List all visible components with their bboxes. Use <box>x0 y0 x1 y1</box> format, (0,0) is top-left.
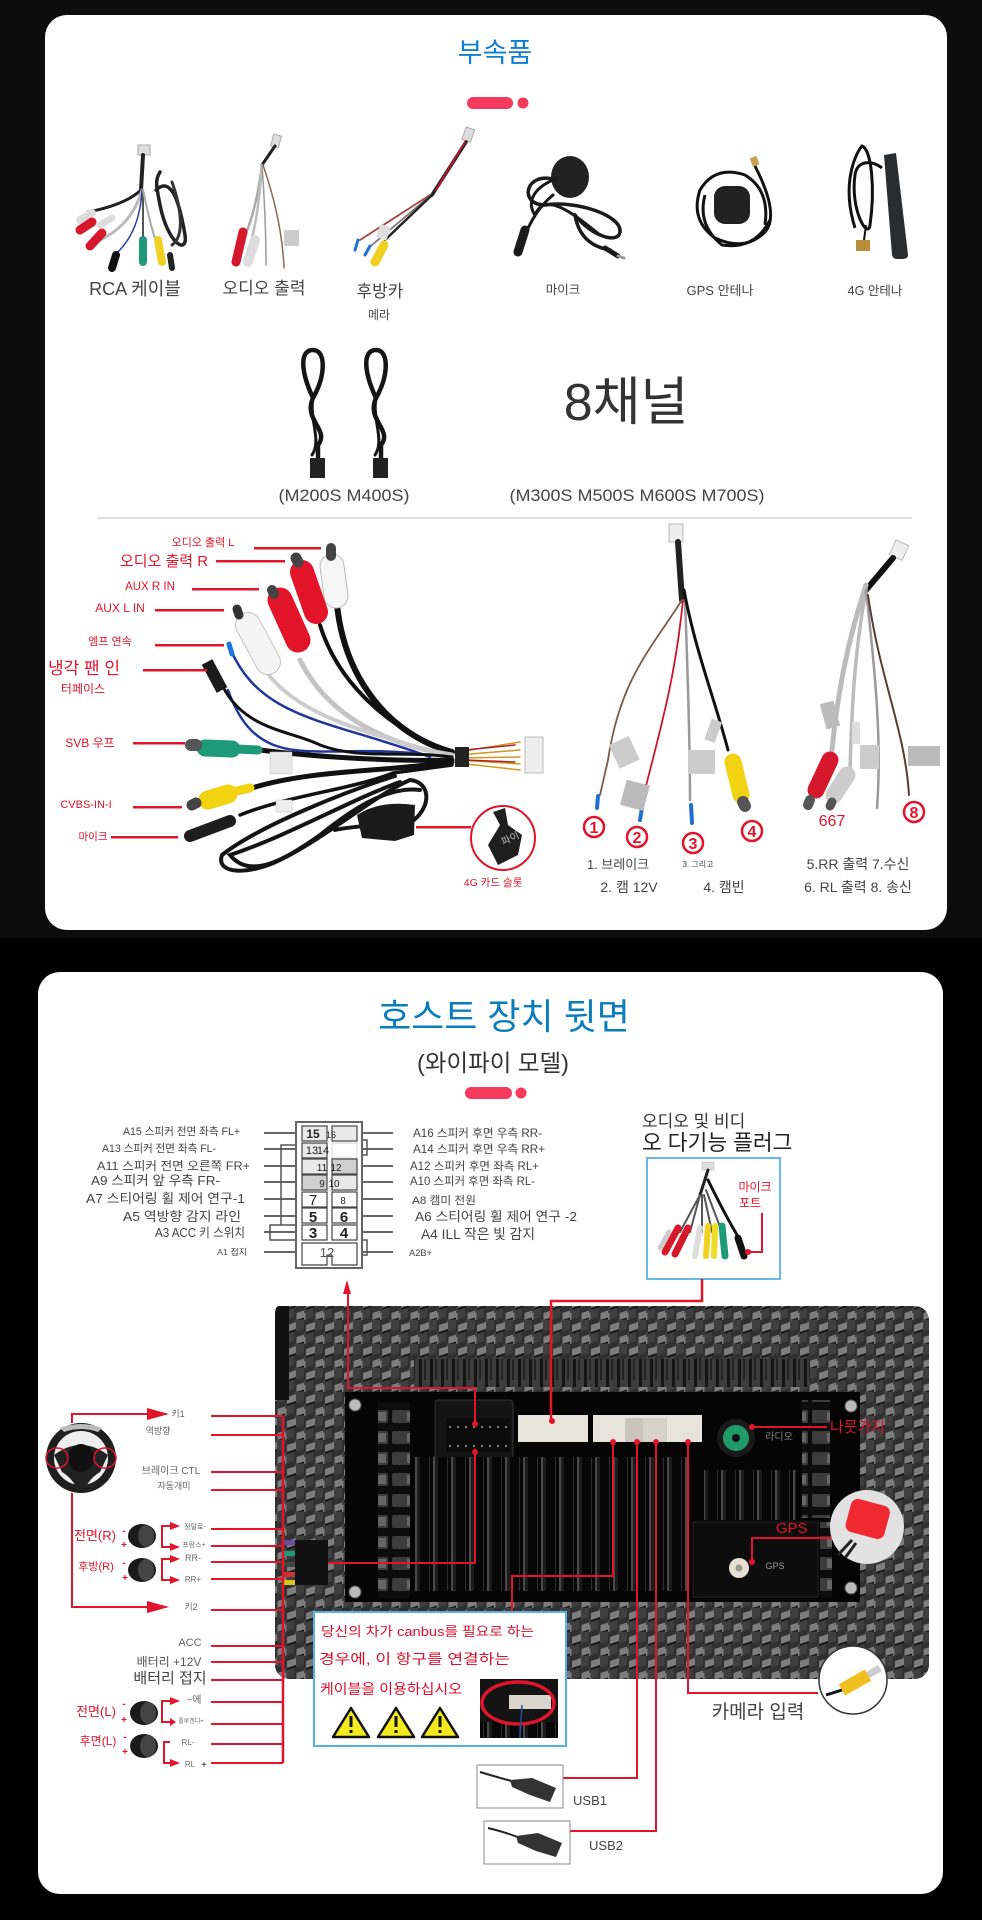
pinout labels: A1 접지 <box>217 1247 247 1257</box>
accessory: 4G antenna <box>849 146 908 259</box>
pinout labels: A2B+ <box>409 1248 432 1258</box>
diagram: ISO connector pinout: 16 <box>326 1130 336 1140</box>
wire labels: RL- <box>182 1738 195 1747</box>
canbus socket <box>435 1400 513 1490</box>
label: mic: 마이크 <box>79 831 108 843</box>
wire labels: 프랑스+ <box>182 1541 206 1549</box>
diagram: ISO connector pinout: 12 <box>320 1245 334 1260</box>
panel: multifunction plug image <box>647 1158 780 1279</box>
left connector comb <box>378 1403 410 1598</box>
wire labels: 정말로- <box>184 1522 206 1531</box>
plug: fan connector <box>207 662 222 690</box>
USB cable 1 <box>477 1765 563 1808</box>
pinout labels <box>86 1125 577 1258</box>
speaker icons: - <box>122 1526 126 1537</box>
head unit body <box>275 1306 929 1679</box>
label: SVB woofer: SVB 우프 <box>65 736 115 750</box>
pinout labels: A7 스티어링 휠 제어 연구-1 <box>86 1191 245 1206</box>
accessory: reversing camera cable <box>355 127 475 262</box>
pinout labels: A3 ACC 키 스위치 <box>155 1226 245 1240</box>
label: harness number 667: 667 <box>819 813 845 830</box>
label: cam 12V: 2. 캠 12V <box>600 879 658 895</box>
plug: CVBS yellow <box>208 794 228 800</box>
panel: host unit rear <box>38 972 943 1894</box>
label: microphone: 마이크 <box>546 283 580 297</box>
connector <box>458 742 520 770</box>
label: AUX R IN: AUX R IN <box>125 581 175 593</box>
pinout labels: A9 스피커 앞 우측 FR- <box>91 1173 220 1188</box>
wire labels: 배터리 +12V <box>137 1655 201 1669</box>
accessory: GPS antenna <box>697 156 771 246</box>
diagram: camera harness <box>597 524 745 823</box>
cables <box>220 605 452 815</box>
pinout labels: A4 ILL 작은 빛 감지 <box>421 1226 535 1242</box>
diagram: large RCA harness <box>190 548 543 871</box>
speaker icons: - <box>122 1558 126 1569</box>
wire labels: 브레이크 CTL <box>142 1465 201 1477</box>
plug: AUX R <box>280 600 298 640</box>
diagram: audio output harness <box>808 540 940 808</box>
speaker labels: 전면(R) <box>74 1528 116 1543</box>
diagram: ISO connector pinout <box>264 1122 393 1268</box>
diagram: ISO connector pinout: 10 <box>328 1179 340 1190</box>
plug: mic <box>190 821 230 836</box>
callout: canbus note: 경우에, 이 항구를 연결하는 <box>319 1651 510 1667</box>
label: rear camera line 2: 메라 <box>368 308 390 322</box>
badge 2: 2 <box>633 830 642 847</box>
diagram: ISO connector pinout: 4 <box>340 1225 349 1242</box>
diagram: ISO connector pinout: 5 <box>309 1209 317 1226</box>
heading ornament <box>467 97 528 109</box>
speaker icons: + <box>121 1715 127 1726</box>
pinout labels: A16 스피커 후면 우측 RR- <box>413 1127 542 1140</box>
speaker icons: + <box>121 1540 127 1551</box>
label: M300S M500S M600S M700S: (M300S M500S M600S M700S) <box>510 486 764 505</box>
number badges <box>584 802 924 853</box>
label: RL out, send: 6. RL 출력 8. 송신 <box>804 879 912 895</box>
label: 4G card slot: 4G 카드 슬롯 <box>464 877 523 889</box>
arrow: to ISO connector <box>343 1280 351 1294</box>
badge 3 <box>683 833 703 853</box>
diagram: ISO connector pinout: 3 <box>309 1225 317 1242</box>
icon: camera plug magnified <box>819 1646 887 1714</box>
screws <box>349 1399 857 1598</box>
pinout labels: A12 스피커 후면 좌측 RL+ <box>410 1160 539 1173</box>
routing lines on head unit <box>328 1279 832 1831</box>
label: RCA cable: RCA 케이블 <box>89 279 181 299</box>
speaker icons: + <box>122 1573 128 1584</box>
pinout labels: A10 스피커 후면 좌측 RL- <box>410 1175 535 1188</box>
speaker labels: 전면(L) <box>76 1704 116 1719</box>
diagram: ISO connector pinout: 15 <box>306 1127 320 1141</box>
label: CVBS-IN: CVBS-IN-I <box>60 799 112 811</box>
wire labels: 자동개미 <box>157 1481 191 1491</box>
wire labels: RL <box>185 1760 196 1769</box>
pinout labels: A13 스피커 전면 좌측 FL- <box>102 1142 216 1155</box>
accessory: microphone <box>518 156 624 258</box>
cable tags <box>270 752 292 774</box>
badge 8: 8 <box>910 805 919 822</box>
callout: canbus note: 케이블을 이용하십시오 <box>320 1681 462 1697</box>
label: audio out R: 오디오 출력 R <box>120 553 208 570</box>
label: mic port: 마이크 <box>738 1180 772 1194</box>
GPS socket <box>729 1558 749 1578</box>
diagram: ISO connector pinout: 13 <box>306 1145 318 1157</box>
diagram: ISO connector pinout: 11 <box>317 1163 328 1174</box>
label: GPS antenna: GPS 안테나 <box>687 283 754 298</box>
heading: AV multifunction plug <box>642 1112 792 1155</box>
icon: 4G card slot magnified: 파이 <box>500 830 521 848</box>
GPS block <box>693 1522 818 1597</box>
label: M200S M400S: (M200S M400S) <box>278 486 410 505</box>
speaker labels: 후방(R) <box>78 1560 114 1573</box>
badge 3: 3 <box>689 836 698 853</box>
label: amp connection: 엠프 연속 <box>88 635 132 648</box>
accessory: RCA cable <box>80 145 185 268</box>
diagram: ISO connector pinout: 9 <box>319 1179 325 1190</box>
USB cable 2 <box>484 1821 570 1864</box>
pinout labels: A15 스피커 전면 좌측 FL+ <box>123 1125 240 1138</box>
wire labels: + <box>201 1760 207 1771</box>
label: AUX L IN: AUX L IN <box>95 601 145 615</box>
heading: accessories: 부속품 <box>458 38 532 68</box>
pinout labels: A5 역방향 감지 라인 <box>123 1209 241 1224</box>
panel: accessories <box>45 15 947 930</box>
label: audio output: 오디오 출력 <box>223 279 305 298</box>
plug: audio out L <box>332 566 336 596</box>
label: radio: 라디오 <box>765 1431 793 1443</box>
badge 2 <box>627 827 647 847</box>
badge 8 <box>904 802 924 822</box>
radio socket <box>717 1419 755 1457</box>
icon: GPS antenna magnified <box>830 1490 904 1564</box>
label: camera input: 카메라 입력 <box>712 1701 804 1723</box>
right connector comb <box>802 1400 830 1518</box>
panel: multifunction plug image: 포트 <box>739 1196 761 1210</box>
wire labels: 배터리 접지 <box>133 1670 207 1687</box>
callout: canbus note <box>314 1612 566 1746</box>
label: 4G antenna: 4G 안테나 <box>848 284 903 298</box>
badge 4: 4 <box>748 824 757 841</box>
accessory: black cable pair <box>303 350 388 478</box>
label: ground: 3. 그리고 <box>683 860 713 869</box>
wire labels: ACC <box>178 1637 202 1649</box>
white connector strip 2 <box>593 1415 702 1442</box>
icon: steering wheel <box>46 1423 116 1493</box>
cable loop <box>221 776 426 871</box>
speaker labels <box>74 1528 116 1748</box>
label: rear camera line 1: 후방카 <box>357 282 404 301</box>
speaker icons: - <box>123 1732 127 1743</box>
heading: AV multifunction plug: 오디오 및 비디 <box>642 1112 745 1131</box>
label: GPS on unit: GPS <box>765 1561 785 1571</box>
wire labels: RR+ <box>185 1575 201 1584</box>
wire labels <box>133 1409 207 1771</box>
diagram: ISO connector pinout: 14 <box>317 1145 329 1157</box>
text: 8 channel: 8채널 <box>564 374 688 432</box>
callout lines and red labels <box>48 536 523 889</box>
speaker icons <box>121 1524 158 1758</box>
label: steering branch: 나뭇가지 <box>830 1419 885 1436</box>
wire labels: 역방향 <box>146 1425 170 1436</box>
speaker icons: + <box>122 1747 128 1758</box>
diagram: ISO connector pinout: 8 <box>340 1196 346 1207</box>
label: cam bin: 4. 캠빈 <box>703 879 745 895</box>
diagram: ISO connector pinout: 7 <box>309 1192 317 1209</box>
diagram: ISO connector pinout: 6 <box>340 1209 348 1226</box>
badge 1: 1 <box>590 820 599 837</box>
plug: SVB green <box>205 748 232 749</box>
label: USB1: USB1 <box>573 1793 607 1808</box>
plug: amp blue <box>229 644 232 654</box>
heading: host unit rear: 호스트 장치 뒷면 <box>378 996 630 1037</box>
diagram: ISO connector pinout: 12 <box>330 1163 342 1174</box>
speaker icons: - <box>122 1699 126 1710</box>
badge 4 <box>742 821 762 841</box>
white connector strip 1 <box>518 1415 588 1442</box>
wire labels: 키1 <box>171 1409 185 1419</box>
pinout labels: A8 캠미 전원 <box>412 1194 476 1207</box>
subheading: wifi model: (와이파이 모델) <box>417 1050 569 1076</box>
pinout labels: A14 스피커 후면 우측 RR+ <box>413 1143 545 1156</box>
pinout labels: A6 스티어링 휠 제어 연구 -2 <box>415 1209 577 1224</box>
label: USB2: USB2 <box>589 1838 623 1853</box>
wire labels: RR- <box>185 1553 201 1563</box>
pinout labels: A11 스피커 전면 오른쪽 FR+ <box>97 1159 250 1173</box>
wire labels: 플루겐디+ <box>178 1717 204 1725</box>
heading ornament <box>465 1087 526 1099</box>
badge 1 <box>584 817 604 837</box>
wiring harness block <box>295 1540 328 1585</box>
photo: canbus port <box>480 1679 558 1738</box>
wire labels: ~에 <box>186 1694 202 1706</box>
label: GPS red: GPS <box>776 1520 808 1537</box>
heading: AV multifunction plug: 오 다기능 플러그 <box>642 1131 792 1155</box>
accessory: audio output cable <box>236 134 299 268</box>
plug: AUX L <box>248 625 268 662</box>
label: brake: 1. 브레이크 <box>587 857 649 872</box>
callout: canbus note: 당신의 차가 canbus를 필요로 하는 <box>321 1624 534 1639</box>
label: interface: 터페이스 <box>61 682 105 696</box>
label: cooling fan: 냉각 팬 인 <box>48 659 120 678</box>
wire labels: 키2 <box>184 1602 198 1612</box>
label: audio out L: 오디오 출력 L <box>172 536 234 549</box>
wiring: steering and speaker bus <box>72 1408 283 1767</box>
plug: audio out R <box>302 572 316 612</box>
icon: warning triangles <box>333 1708 458 1737</box>
label: RR out, receive: 5.RR 출력 7.수신 <box>807 856 909 872</box>
icon: 4G card slot magnified <box>471 806 535 870</box>
expansion slots <box>415 1457 690 1591</box>
speaker labels: 후면(L) <box>80 1734 116 1748</box>
